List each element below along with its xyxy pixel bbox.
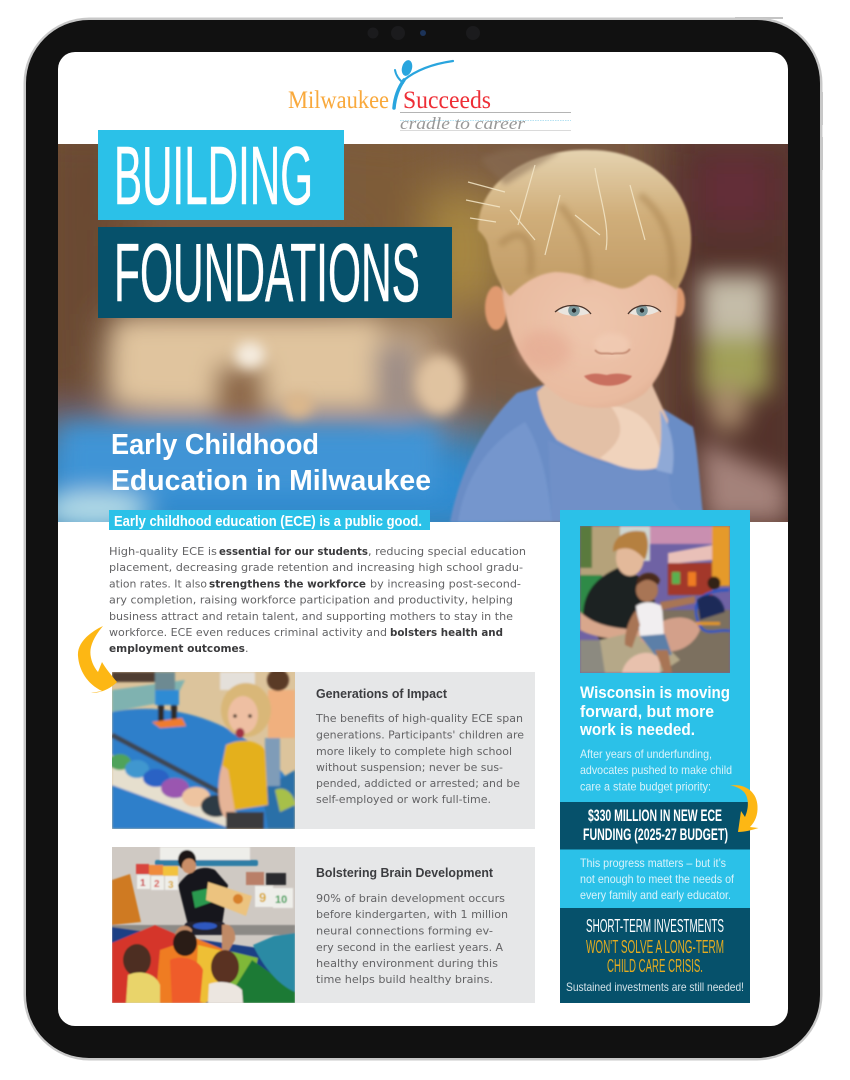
intro paragraph: , reducing special education xyxy=(368,545,526,558)
body: Generations of Impact xyxy=(315,712,524,806)
body: Generations of Impact: more likely to complete high school xyxy=(316,745,512,758)
hero photo: blond toddler xyxy=(58,144,788,522)
arrow: yellow curved right xyxy=(730,785,758,832)
body: Bolstering Brain Development: ery second in the earliest years. A xyxy=(316,941,503,954)
heading: Wisconsin is moving forward: Wisconsin is moving xyxy=(580,684,730,702)
toddler figure xyxy=(450,148,704,522)
body: progress matters: This progress matters – but it’s xyxy=(580,856,726,870)
body: Generations of Impact: self-employed or work full-time. xyxy=(316,793,491,806)
callout: $330 million funding: FUNDING (2025-27 BUDGET) xyxy=(583,825,728,844)
body: progress matters xyxy=(580,856,735,902)
photo: teacher reading to children: 3 xyxy=(168,880,174,891)
body: Generations of Impact: The benefits of high-quality ECE span xyxy=(315,712,523,725)
logo: Milwaukee Succeeds cradle to career: Succeeds xyxy=(403,87,491,114)
body: Bolstering Brain Development: before kindergarten, with 1 million xyxy=(316,908,508,921)
intro paragraph: workforce. ECE even reduces criminal activity and xyxy=(109,626,387,639)
icon: figure swoosh xyxy=(394,59,453,108)
callout: short-term investments: Sustained investments are still needed! xyxy=(566,980,744,994)
intro paragraph: placement, decreasing grade retention and increasing high school gradu- xyxy=(109,561,523,574)
body: after years of underfunding: After years of underfunding, xyxy=(580,747,712,761)
title: FOUNDATIONS: FOUNDATIONS xyxy=(114,226,420,319)
heading: Wisconsin is moving forward: work is needed. xyxy=(579,721,695,739)
arrow: yellow curved left xyxy=(78,626,117,693)
callout: short-term investments xyxy=(560,908,750,1003)
title: FOUNDATIONS xyxy=(98,226,452,319)
intro paragraph: ation rates. It also xyxy=(109,578,207,590)
title: BUILDING: BUILDING xyxy=(114,129,313,222)
body: Bolstering Brain Development: neural connections forming ev- xyxy=(316,924,493,938)
heading: Bolstering Brain Development: Bolstering Brain Development xyxy=(316,865,494,880)
photo: teacher reading to children: 10 xyxy=(275,894,287,906)
subtitle: Early Childhood Education in Milwaukee: Education in Milwaukee xyxy=(111,465,431,497)
intro paragraph: High-quality ECE is xyxy=(109,545,217,558)
panel: Generations of Impact xyxy=(109,669,535,829)
heading: Wisconsin is moving forward: forward, but more xyxy=(580,703,714,721)
photo: girl on number rug xyxy=(109,669,295,829)
logo: Milwaukee Succeeds cradle to career: cradle to career xyxy=(400,114,525,133)
photo: teacher reading to children: 2 xyxy=(154,879,160,890)
intro paragraph: employment outcomes xyxy=(109,642,245,655)
body: Generations of Impact: pended, addicted or arrested; and be xyxy=(316,777,520,790)
body: progress matters: every family and early educator. xyxy=(580,888,731,902)
logo: Milwaukee Succeeds cradle to career: Milwaukee xyxy=(288,87,389,114)
sidebar panel: Wisconsin xyxy=(560,510,750,908)
callout: short-term investments: SHORT-TERM INVESTMENTS xyxy=(586,916,724,936)
body: Bolstering Brain Development: time helps build healthy brains. xyxy=(316,973,493,986)
callout: $330 million funding: $330 MILLION IN NEW ECE xyxy=(588,806,722,825)
intro paragraph: ary completion, raising workforce participation and productivity, helping xyxy=(109,594,513,606)
heading: Generations of Impact: Generations of Impact xyxy=(316,686,448,701)
body: after years of underfunding xyxy=(580,747,732,794)
body: after years of underfunding: care a state budget priority: xyxy=(580,780,711,794)
intro paragraph: . xyxy=(245,642,248,655)
body: progress matters: not enough to meet the needs of xyxy=(580,872,735,886)
banner: public good: Early childhood education (ECE) is a public good. xyxy=(114,513,422,530)
intro paragraph: business attract and retain talent, and supporting mothers to stay in the xyxy=(109,610,513,623)
panel: Bolstering Brain Development xyxy=(112,847,535,1003)
intro paragraph: by increasing post-second- xyxy=(370,578,521,590)
photo: teacher reading to children: 9 xyxy=(259,890,266,905)
photo: teacher reading to children: 1 xyxy=(140,878,146,889)
subtitle: Early Childhood Education in Milwaukee xyxy=(111,429,431,497)
callout: $330 million funding xyxy=(560,802,750,850)
callout: short-term investments: CHILD CARE CRISIS. xyxy=(607,956,703,976)
body: Generations of Impact: generations. Participants' children are xyxy=(316,728,524,742)
photo: caregiver with child xyxy=(580,526,730,673)
intro paragraph xyxy=(109,545,526,655)
callout: short-term investments: WON'T SOLVE A LONG-TERM xyxy=(586,937,724,957)
subtitle: Early Childhood Education in Milwaukee: Early Childhood xyxy=(111,429,319,461)
photo: teacher reading to children xyxy=(112,847,295,1003)
title: BUILDING xyxy=(98,129,344,222)
body: Bolstering Brain Development: healthy environment during this xyxy=(316,957,498,970)
body: Bolstering Brain Development xyxy=(316,892,508,986)
body: Generations of Impact: without suspension; never be sus- xyxy=(316,761,503,774)
heading: Wisconsin is moving forward xyxy=(579,684,730,739)
logo: Milwaukee Succeeds cradle to career xyxy=(288,59,571,133)
body: Bolstering Brain Development: 90% of brain development occurs xyxy=(316,892,505,905)
intro paragraph: bolsters health and xyxy=(390,626,503,639)
body: after years of underfunding: advocates pushed to make child xyxy=(580,763,732,777)
intro paragraph: strengthens the workforce xyxy=(209,578,366,590)
intro paragraph: essential for our students xyxy=(219,545,368,558)
